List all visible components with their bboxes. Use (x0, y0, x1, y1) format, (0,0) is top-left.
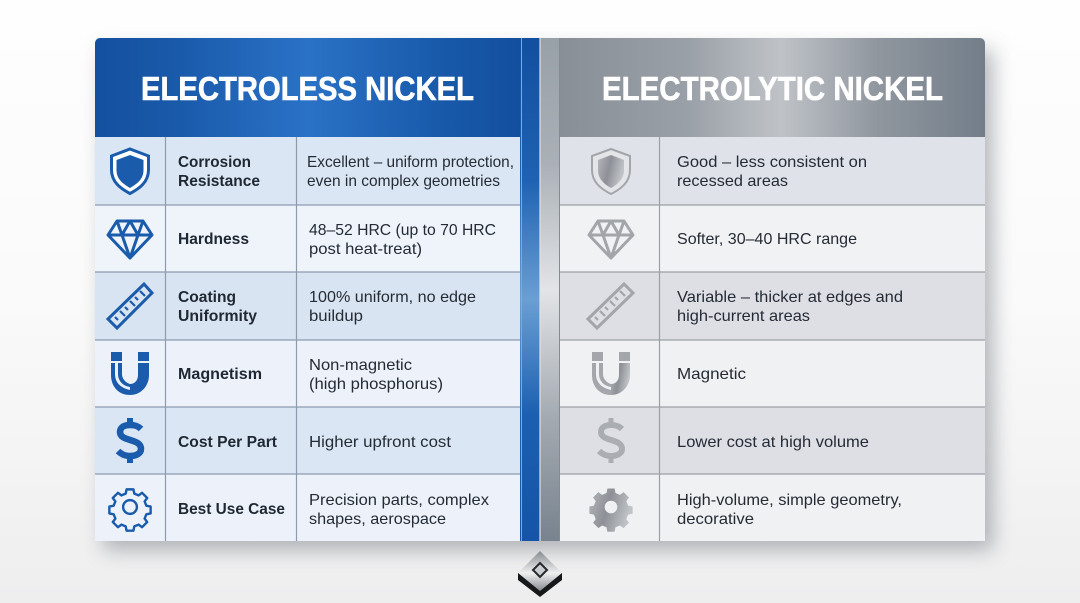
row: corrosion resistance: recessed areas (677, 173, 788, 190)
row: magnetism (111, 352, 443, 395)
row: coating uniformity: buildup (309, 308, 363, 325)
row: cost per part (118, 418, 452, 463)
row: best use case (589, 489, 902, 532)
row: coating uniformity: Uniformity (178, 308, 257, 325)
row: corrosion resistance: Corrosion (178, 154, 251, 171)
row: magnetism: (high phosphorus) (309, 376, 443, 393)
center divider (520, 38, 560, 541)
icon: dollar (599, 418, 622, 463)
icon: ruler (108, 284, 152, 328)
icon: shield (592, 149, 630, 194)
row: coating uniformity: 100% uniform, no edge (309, 289, 476, 306)
row: hardness (589, 221, 857, 258)
row: corrosion resistance (592, 149, 867, 194)
header: electroless (95, 38, 520, 137)
icon: ruler (588, 284, 633, 328)
row: corrosion resistance: Excellent – uniform protection, (307, 154, 514, 171)
row: coating uniformity (588, 284, 903, 328)
row: coating uniformity: Variable – thicker at edges and (677, 289, 903, 306)
header: electroless: ELECTROLESS NICKEL (141, 70, 474, 107)
header: electrolytic: ELECTROLYTIC NICKEL (602, 70, 943, 107)
row: corrosion resistance: Resistance (178, 173, 260, 190)
panel: electrolytic nickel (560, 38, 985, 541)
row: hardness: Hardness (178, 231, 249, 248)
row backgrounds (95, 137, 520, 541)
row: cost per part: Higher upfront cost (309, 434, 452, 451)
row: hardness (108, 221, 496, 258)
icon: dollar (118, 418, 141, 463)
row: coating uniformity: high-current areas (677, 308, 810, 325)
row: corrosion resistance: even in complex geometries (307, 173, 500, 190)
row: best use case: shapes, aerospace (309, 511, 446, 528)
panel: electroless nickel (95, 38, 520, 541)
row: coating uniformity (108, 284, 476, 328)
row: best use case (109, 489, 489, 531)
header: electrolytic (560, 38, 985, 137)
row: magnetism: Magnetism (178, 366, 262, 383)
row: cost per part (599, 418, 869, 463)
icon: magnet (111, 352, 149, 395)
icon: diamond (108, 221, 152, 258)
icon: shield (112, 149, 148, 194)
row: corrosion resistance: Good – less consistent on (677, 154, 867, 171)
icon: bottom diamond emblem (518, 551, 562, 597)
row: best use case: Precision parts, complex (309, 492, 489, 509)
row: coating uniformity: Coating (178, 289, 236, 306)
row: cost per part: Cost Per Part (178, 434, 278, 451)
icon: gear (109, 489, 151, 531)
row: hardness: 48–52 HRC (up to 70 HRC (309, 222, 496, 239)
card shadow (103, 50, 993, 550)
row: best use case: High-volume, simple geometry, (677, 492, 902, 509)
row: hardness: post heat-treat) (309, 241, 422, 258)
row backgrounds (560, 137, 985, 541)
icon: magnet (592, 352, 630, 395)
row: cost per part: Lower cost at high volume (677, 434, 869, 451)
row: corrosion resistance (112, 149, 514, 194)
row: hardness: Softer, 30–40 HRC range (677, 231, 857, 248)
row: magnetism: Non-magnetic (309, 357, 412, 374)
row: magnetism: Magnetic (677, 366, 746, 383)
row: best use case: Best Use Case (178, 501, 285, 518)
row: magnetism (592, 352, 746, 395)
icon: gear (589, 489, 633, 532)
icon: diamond (589, 221, 633, 258)
row: best use case: decorative (677, 511, 754, 528)
